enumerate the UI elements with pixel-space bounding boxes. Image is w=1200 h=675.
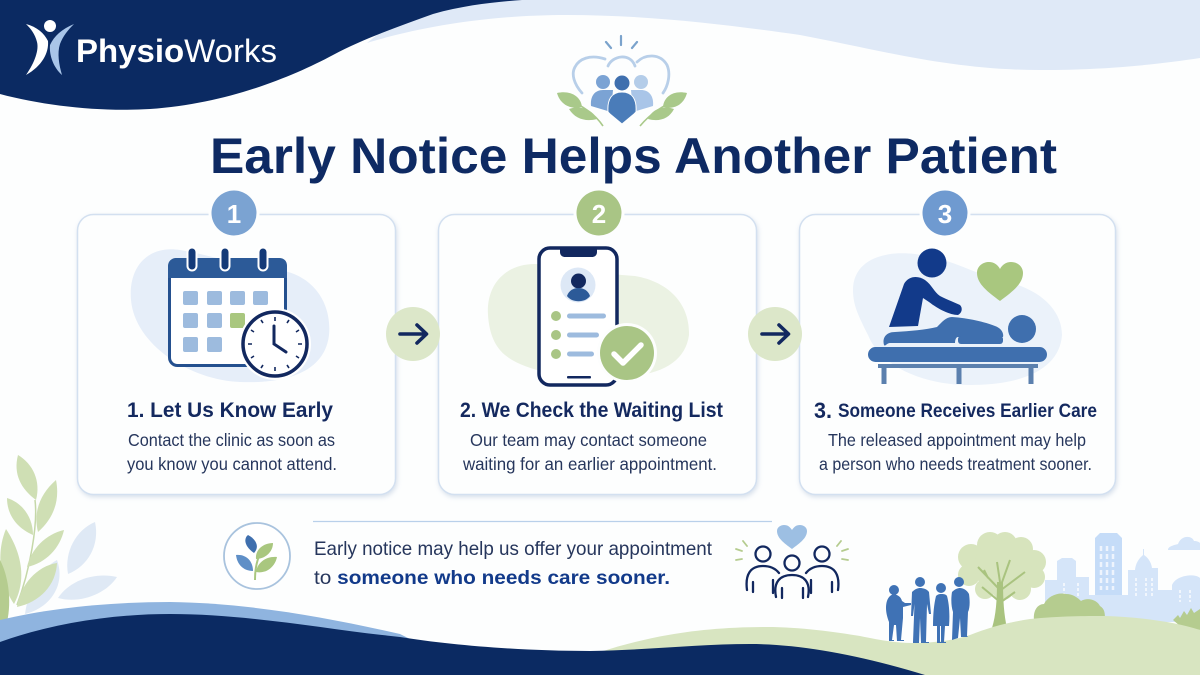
callout text: Early notice may help us offer your appointment	[314, 538, 713, 560]
badge 2	[574, 188, 624, 238]
green hills	[600, 616, 1200, 675]
step 3 body: a person who needs treatment sooner.	[819, 454, 1092, 474]
top light blue wave	[367, 0, 1200, 70]
bottom light blue wave	[0, 602, 412, 660]
logo wordmark: PhysioWorks	[76, 33, 277, 69]
panel: step 2	[438, 188, 756, 494]
icon: group with heart	[736, 525, 848, 598]
tree	[958, 532, 1046, 628]
step 3 heading: 3.	[814, 398, 832, 423]
step 3 body: The released appointment may help	[828, 430, 1086, 450]
icon: phone with check	[539, 247, 657, 385]
silhouettes of four people	[886, 577, 970, 643]
icon: therapist and patient	[868, 248, 1047, 384]
callout text: to someone who needs care sooner.	[314, 567, 649, 589]
blob background	[853, 253, 1062, 385]
badge 3	[920, 188, 970, 238]
step 2 body: Our team may contact someone	[470, 430, 707, 450]
badge 1	[208, 188, 260, 238]
step 2 heading: 2. We Check the Waiting List	[460, 399, 723, 422]
top navy wave	[0, 0, 522, 110]
blob background	[488, 264, 689, 377]
bush	[1034, 593, 1105, 620]
logo mark	[26, 20, 74, 75]
step 1 heading: 1. Let Us Know Early	[127, 399, 333, 422]
step 1 body: you know you cannot attend.	[127, 454, 337, 474]
icon: calendar with clock	[168, 252, 311, 380]
city skyline	[1045, 533, 1200, 622]
back hill	[970, 617, 1060, 645]
decorative plant left	[0, 455, 117, 622]
badge 3: 3	[938, 199, 952, 229]
badge 1: 1	[227, 199, 241, 229]
right shrub	[1173, 608, 1200, 630]
icon: community heart	[557, 36, 687, 126]
logo	[26, 20, 277, 75]
step 2 body: waiting for an earlier appointment.	[462, 454, 717, 474]
blob background	[131, 249, 329, 382]
bottom navy wave	[0, 614, 925, 675]
icon: heart	[977, 262, 1023, 301]
divider	[313, 520, 772, 522]
arrow 1	[386, 307, 440, 361]
badge 2: 2	[592, 199, 606, 229]
panel: step 1	[78, 188, 396, 494]
step 3 heading: Someone Receives Earlier Care	[838, 401, 1097, 422]
panel: step 3	[800, 188, 1116, 494]
arrow 2	[748, 307, 802, 361]
title: Early Notice Helps Another Patient	[210, 128, 1057, 184]
step 1 body: Contact the clinic as soon as	[128, 430, 335, 450]
icon: sprout badge	[224, 523, 290, 589]
